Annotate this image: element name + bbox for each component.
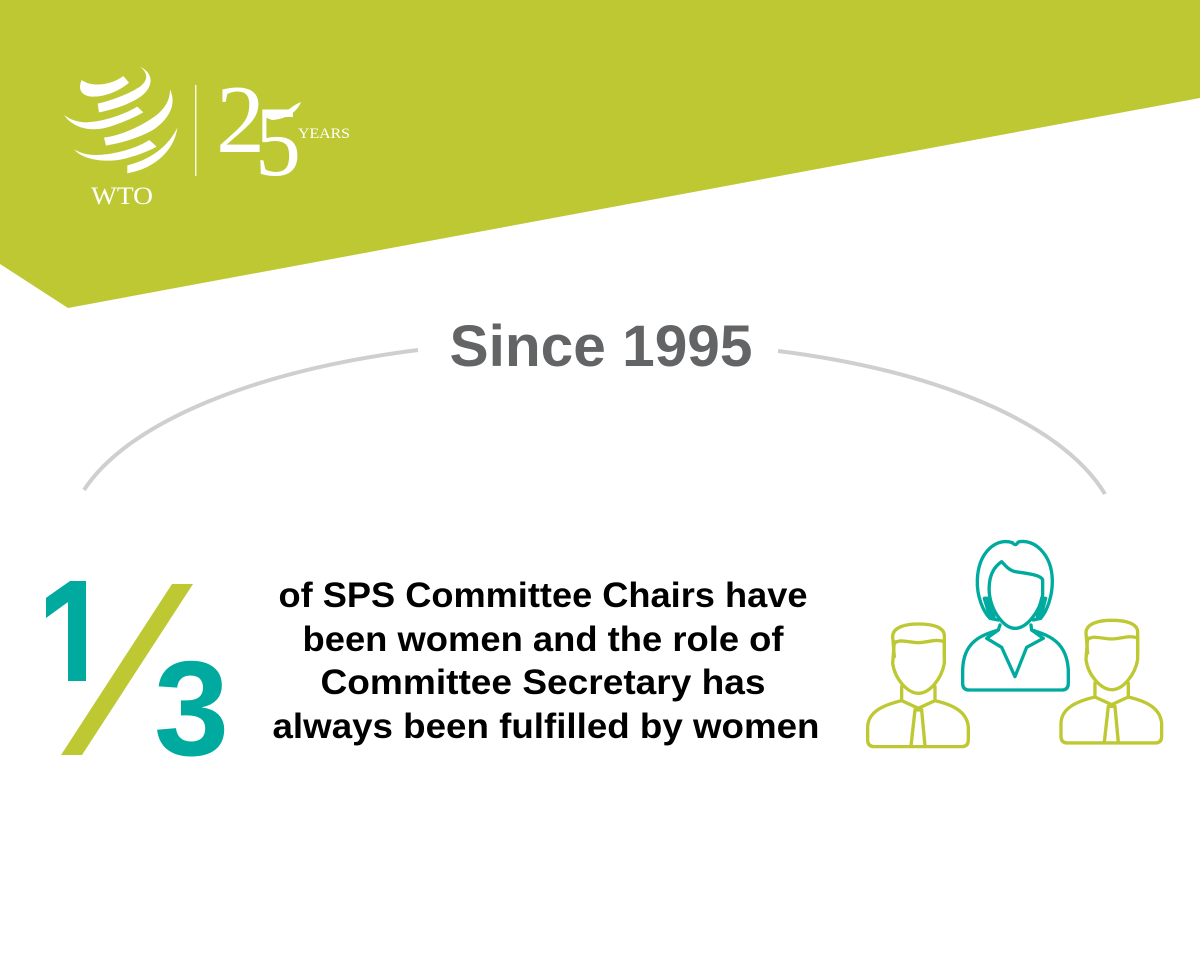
icon: WTO globe swooshes (64, 67, 177, 173)
25 numeral: 5 (255, 86, 301, 197)
statement text: Committee Secretary has (320, 663, 766, 702)
heading: Since 1995: Since 1995 (450, 314, 752, 379)
statement text (272, 576, 820, 746)
WTO wordmark: WTO (91, 183, 153, 210)
green header banner (0, 0, 1200, 308)
logo divider (195, 85, 196, 176)
YEARS label: YEARS (298, 126, 350, 142)
numerator 1: 1 (33, 553, 112, 712)
25 numeral (216, 66, 301, 197)
arc: left (84, 350, 418, 490)
statement text: of SPS Committee Chairs have (278, 576, 808, 615)
WTO 25 years logo (64, 66, 350, 210)
icon: man right (1061, 620, 1162, 743)
statement text: been women and the role of (302, 620, 784, 659)
25 numeral: 2 (216, 66, 265, 174)
icon: group of three people (868, 541, 1162, 747)
icon: woman (963, 541, 1068, 690)
fraction slash (61, 584, 193, 755)
fraction one third (46, 581, 224, 756)
arc: right (778, 351, 1105, 494)
icon: man left (868, 624, 968, 747)
statement text: always been fulfilled by women (272, 707, 820, 746)
numerator 1 (46, 581, 86, 681)
denominator 3: 3 (154, 633, 229, 784)
